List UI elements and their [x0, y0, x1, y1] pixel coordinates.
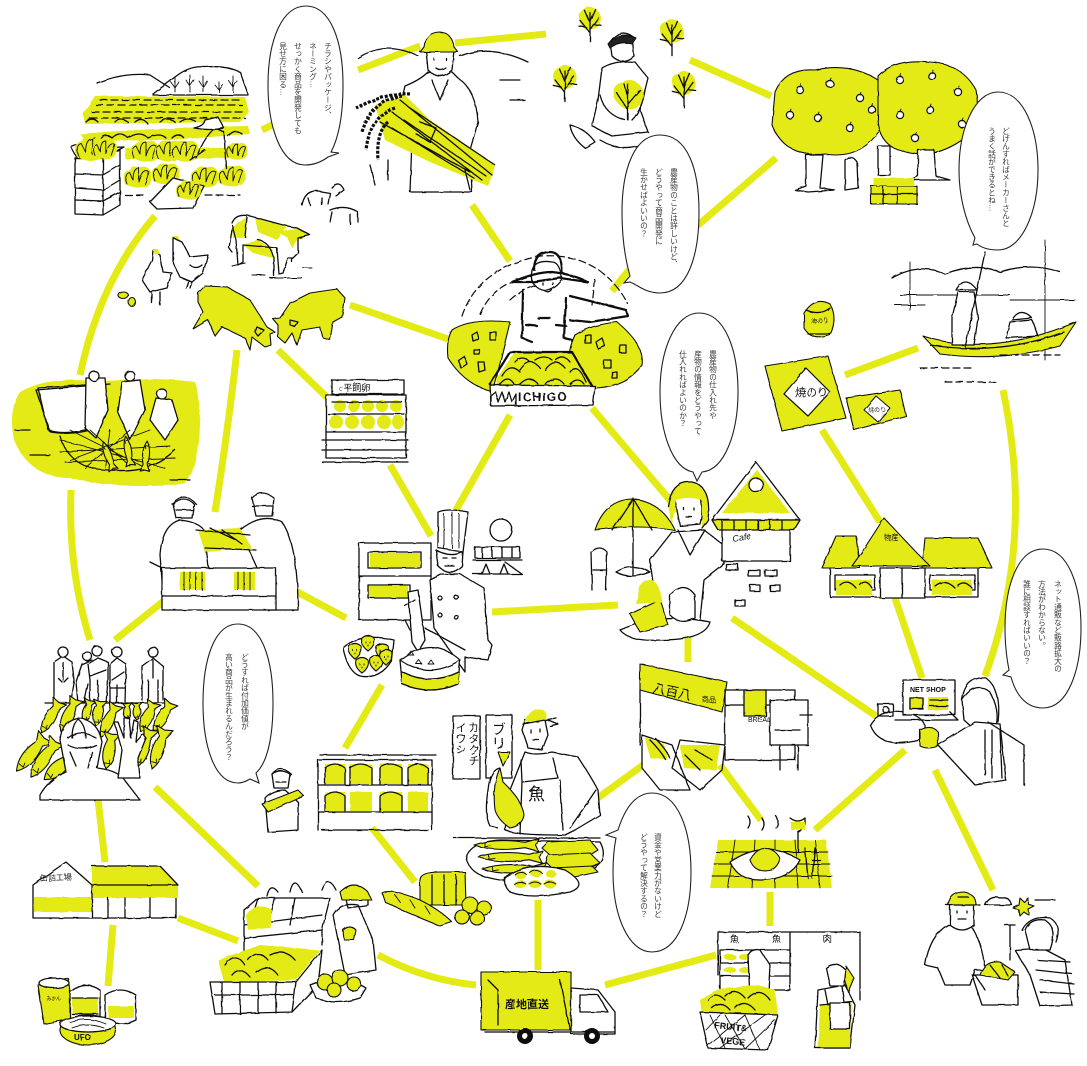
illustration: greengrocer	[640, 664, 812, 790]
illustration: cafe woman: Cafe	[732, 531, 752, 544]
speech bubble: flyers and packaging: せっかく商品を開発しても	[293, 42, 302, 134]
illustration: egg tray: ○平飼卵	[338, 382, 370, 393]
illustration: egg tray	[322, 380, 408, 462]
illustration: fishmonger: 魚	[528, 785, 545, 804]
speech bubble: product development: 農産物のことは詳しいけど、	[669, 167, 678, 268]
illustration: grocery market: VEGE	[720, 1035, 746, 1048]
illustration: bread factory	[262, 755, 436, 832]
illustration: grocery market	[700, 932, 860, 1050]
illustration: breads	[382, 872, 491, 926]
illustration: canned goods	[38, 978, 136, 1045]
speech bubble: product development: 生かせばよいいの？	[639, 167, 648, 237]
illustration: strawberry farmer ICHIGO	[448, 252, 642, 406]
speech bubble: sales channels: ネット通販など販路拡大の	[1053, 580, 1062, 672]
speech bubble: maker negotiation: うまく話ができるとね…	[987, 127, 996, 212]
illustration: canned goods: UFO	[74, 1033, 91, 1042]
illustration: cafe woman	[591, 462, 800, 640]
illustration: grocery market: FRUIT&	[714, 1020, 748, 1033]
illustration: strawberry farmer ICHIGO: ICHIGO	[518, 390, 568, 404]
illustration: rice farmer	[356, 32, 528, 192]
illustration: delivery truck: 産地直送	[505, 997, 549, 1011]
speech bubble: sourcing: 仕入れればよいのか？	[678, 349, 688, 427]
illustration: delivery truck	[481, 972, 615, 1044]
speech bubble: added value	[203, 624, 273, 783]
illustration: net shop owner	[870, 678, 1024, 785]
illustration: grocery market: 肉	[823, 933, 832, 944]
speech bubble: flyers and packaging: チラシやパッケージ、	[323, 42, 332, 119]
illustration: greengrocer: 八百八	[651, 680, 693, 703]
speech bubble: added value: どうすれば付加価値が	[240, 653, 250, 730]
speech bubble: product development: どうやって商品開発に	[654, 168, 664, 245]
illustration: orchard	[772, 61, 977, 204]
illustration: canned goods: みかん	[46, 995, 61, 1002]
speech bubble: maker negotiation: どげんすればメーカーさんと	[1001, 127, 1010, 227]
illustration: cannery	[33, 862, 178, 918]
illustration: pastry chef	[343, 510, 522, 690]
illustration: net shop owner: NET SHOP	[910, 687, 946, 694]
illustration: nori boat	[892, 240, 1076, 382]
illustration: fishermen at market	[10, 646, 178, 800]
illustration: nori products: 焼のり	[795, 386, 828, 399]
illustration: seedling planter	[553, 7, 696, 148]
speech bubble: flyers and packaging: 見せ方に困る…	[278, 42, 288, 96]
speech bubble: sales channels: 誰に相談すればいいの？	[1022, 579, 1032, 665]
speech bubble: flyers and packaging: ネーミング…	[308, 42, 318, 88]
illustration: nori products: 焼のり	[868, 406, 886, 414]
illustration: fishing boat with net	[12, 371, 200, 486]
illustration: fishmonger: カタクチ	[467, 722, 479, 766]
illustration: nori products: 海のり	[811, 317, 829, 325]
illustration: fishmonger: イワシ	[454, 722, 466, 755]
illustration: vegetable market	[210, 882, 376, 1014]
illustration: gift shop	[822, 518, 992, 598]
illustration: fishmonger	[453, 709, 603, 896]
speech bubble: sourcing: 農産物の仕入れ先や	[708, 349, 718, 419]
illustration: livestock	[118, 184, 358, 350]
speech bubble: maker negotiation	[959, 92, 1038, 250]
speech bubble: funding and sales	[606, 793, 691, 952]
illustration: greengrocer: BREAD	[748, 717, 772, 724]
speech bubble: funding and sales: 資金や営業力がないけど	[653, 832, 662, 918]
illustration: grocery market: 魚	[772, 933, 781, 944]
speech bubble: sourcing: 産物の情報をどうやって	[693, 349, 702, 435]
speech bubble: sales channels: 方法がわからない。	[1037, 579, 1046, 649]
speech bubble: sourcing	[660, 313, 738, 481]
illustration: greengrocer: 商品	[702, 695, 716, 704]
yellow connector network	[71, 34, 1015, 986]
illustration: customers	[925, 892, 1074, 1006]
speech bubble: added value: 高い商品が生まれるんだろう？	[224, 652, 234, 761]
speech bubble: product development	[622, 135, 699, 293]
illustration: restaurant table	[710, 816, 832, 888]
speech bubble: sales channels	[1003, 549, 1081, 708]
speech bubble: flyers and packaging	[268, 6, 343, 165]
illustration: vegetable field	[71, 67, 250, 215]
illustration: cannery: 缶詰工場	[40, 872, 72, 883]
illustration: nori products	[765, 301, 906, 431]
illustration: fishmonger: ブリ	[491, 722, 507, 750]
illustration: grocery market: 魚	[730, 933, 739, 944]
illustration: processing workers	[150, 493, 298, 610]
speech bubble: funding and sales: どうやって解決するの？	[639, 833, 648, 918]
illustration: gift shop: 物産	[884, 532, 899, 542]
